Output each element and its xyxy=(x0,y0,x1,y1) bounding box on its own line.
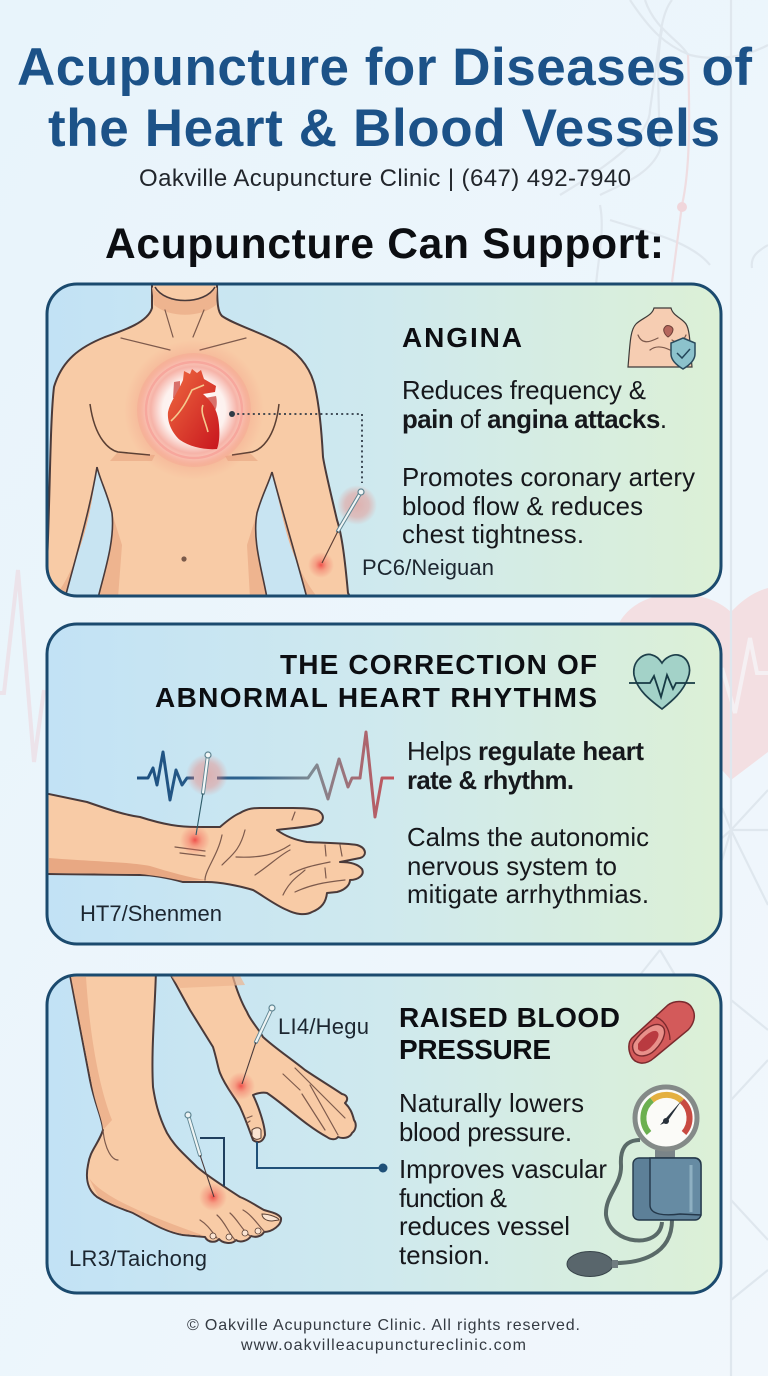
text: blood pressure benefits xyxy=(399,1090,607,1270)
title xyxy=(17,38,752,158)
needle: LR3 xyxy=(185,1112,214,1197)
text: angina benefits: blood flow & reduces xyxy=(402,493,643,521)
heading: heart rhythms xyxy=(155,649,597,713)
text: blood pressure benefits: blood pressure. xyxy=(399,1119,572,1147)
heading: raised blood pressure: RAISED BLOOD xyxy=(399,1002,620,1033)
subtitle: clinic and phone: Oakville Acupuncture Clinic | (647) 492-7940 xyxy=(139,165,631,192)
text: blood pressure benefits: Improves vascular xyxy=(399,1156,607,1184)
title: Acupuncture for Diseases of xyxy=(17,38,752,97)
text: rhythm benefits xyxy=(407,738,649,909)
text: angina benefits: pain of angina attacks. xyxy=(402,406,667,434)
text: rhythm benefits: Helps regulate heart xyxy=(407,738,644,766)
torso illustration xyxy=(44,280,377,600)
section heading: Acupuncture Can Support: xyxy=(105,221,664,268)
footer xyxy=(187,1317,580,1354)
needle xyxy=(196,752,211,835)
icon: blood pressure monitor xyxy=(567,1087,701,1276)
heading: heart rhythms: ABNORMAL HEART RHYTHMS xyxy=(155,682,597,713)
text: angina benefits: Promotes coronary artery xyxy=(402,464,695,492)
text: blood pressure benefits: Naturally lowers xyxy=(399,1090,584,1118)
footer: www.oakvilleacupunctureclinic.com xyxy=(240,1337,526,1354)
icon: heart with ECG xyxy=(629,654,695,709)
heading: heart rhythms: THE CORRECTION OF xyxy=(280,649,597,680)
heading: raised blood pressure: PRESSURE xyxy=(399,1034,551,1065)
text: blood pressure benefits: tension. xyxy=(399,1242,490,1270)
text: rhythm benefits: rate & rhythm. xyxy=(407,767,574,795)
text: blood pressure benefits: reduces vessel xyxy=(399,1213,570,1241)
foot xyxy=(69,970,281,1243)
label: LR3/Taichong: LR3/Taichong xyxy=(69,1246,207,1271)
icon: chest with shield xyxy=(628,308,695,369)
dotted connector xyxy=(232,414,362,483)
text: blood pressure benefits: function & xyxy=(399,1185,507,1213)
panel: angina xyxy=(44,280,721,600)
ECG line xyxy=(137,732,394,817)
text: angina benefits: Reduces frequency & xyxy=(402,377,646,405)
text: rhythm benefits: mitigate arrhythmias. xyxy=(407,881,649,909)
panel: abnormal heart rhythms xyxy=(44,624,721,944)
heart xyxy=(168,369,219,449)
label: LI4/Hegu: LI4/Hegu xyxy=(278,1014,369,1039)
connector lines xyxy=(200,1138,388,1186)
heading: raised blood pressure xyxy=(399,1002,620,1065)
hand xyxy=(168,970,356,1142)
label: PC6/Neiguan: PC6/Neiguan xyxy=(362,555,494,580)
panel: raised blood pressure xyxy=(47,970,721,1293)
text: angina benefits: chest tightness. xyxy=(402,521,584,549)
icon: blood vessel xyxy=(629,1002,694,1063)
hand and wrist illustration xyxy=(44,793,365,914)
leg, foot and hand illustration xyxy=(69,970,356,1243)
text: rhythm benefits: Calms the autonomic xyxy=(407,824,649,852)
needle xyxy=(322,489,364,563)
footer: © Oakville Acupuncture Clinic. All rights reserved. xyxy=(187,1317,580,1334)
needle: LI4 xyxy=(242,1005,275,1084)
text: angina benefits xyxy=(402,377,695,549)
label: HT7/Shenmen: HT7/Shenmen xyxy=(80,901,222,926)
text: rhythm benefits: nervous system to xyxy=(407,853,617,881)
heading: angina: ANGINA xyxy=(402,322,522,353)
title: the Heart & Blood Vessels xyxy=(48,99,720,158)
